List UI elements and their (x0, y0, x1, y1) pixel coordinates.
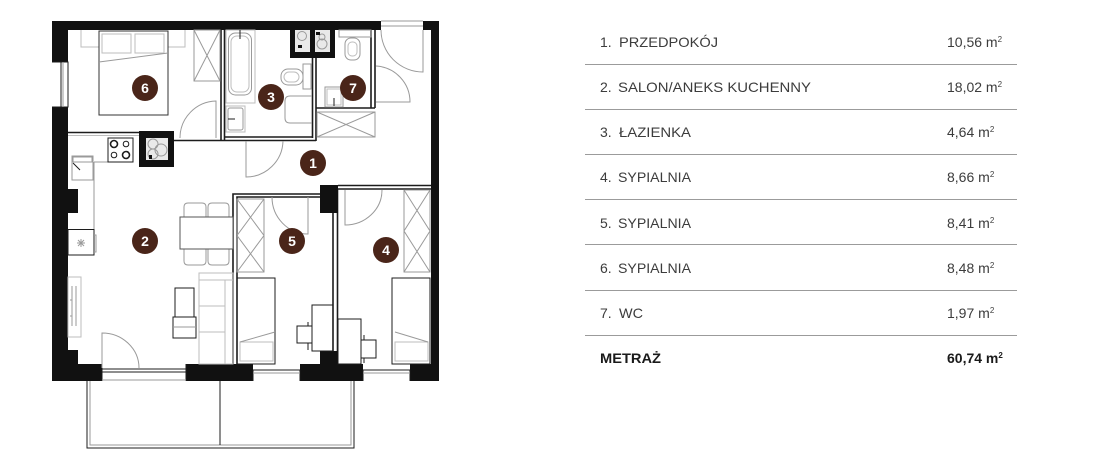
row 7: 2 (990, 306, 995, 315)
row 1 (600, 34, 1003, 50)
row 1: 2 (998, 35, 1003, 44)
row 3: 4,64 m (947, 124, 990, 140)
row 5 (600, 215, 995, 231)
exterior walls (52, 21, 439, 381)
row 2: 2 (998, 80, 1003, 89)
floor plan (52, 20, 439, 448)
dining table (180, 203, 233, 265)
area table (585, 34, 1017, 366)
room marker 1 (300, 150, 326, 176)
row 6: 2 (990, 261, 995, 270)
living room seating (173, 273, 233, 364)
total row (600, 350, 1003, 366)
balcony (87, 381, 354, 448)
room marker 6: 6 (141, 80, 149, 96)
row 2: 18,02 m (947, 79, 998, 95)
row 7 (600, 305, 995, 321)
room marker 7: 7 (349, 80, 357, 96)
row 3: 3. (600, 124, 612, 140)
row 4 (600, 169, 995, 185)
shaft: kitchen (139, 131, 174, 167)
row 7: WC (619, 305, 643, 321)
row 2: SALON/ANEKS KUCHENNY (618, 79, 812, 95)
row 7: 7. (600, 305, 612, 321)
total row: 2 (998, 351, 1003, 360)
total row: METRAŻ (600, 350, 661, 366)
interior walls (174, 30, 431, 365)
room marker 4 (373, 237, 399, 263)
room marker 4: 4 (382, 242, 390, 258)
room marker 1: 1 (309, 155, 317, 171)
room marker 6 (132, 75, 158, 101)
row 1: PRZEDPOKÓJ (619, 34, 718, 50)
row 4: 8,66 m (947, 169, 990, 185)
bedroom 4 furniture (338, 190, 430, 364)
closet (317, 112, 375, 137)
room marker 7 (340, 75, 366, 101)
row 6: SYPIALNIA (618, 260, 692, 276)
row 6: 6. (600, 260, 612, 276)
row 4: SYPIALNIA (618, 169, 692, 185)
bedroom 5 furniture (237, 199, 333, 364)
row 1: 10,56 m (947, 34, 998, 50)
row 5: SYPIALNIA (618, 215, 692, 231)
row 2 (600, 79, 1003, 95)
row 4: 2 (990, 170, 995, 179)
doors (102, 30, 423, 368)
row 3: 2 (990, 125, 995, 134)
row 6: 8,48 m (947, 260, 990, 276)
row 1: 1. (600, 34, 612, 50)
bedroom 6 furniture (81, 30, 220, 115)
room marker 2 (132, 228, 158, 254)
room marker 2: 2 (141, 233, 149, 249)
shaft: bathroom (290, 30, 335, 58)
row 4: 4. (600, 169, 612, 185)
WC fixtures (325, 30, 371, 107)
room marker 5 (279, 228, 305, 254)
row 7: 1,97 m (947, 305, 990, 321)
row 5: 2 (990, 216, 995, 225)
bathroom fixtures (226, 30, 312, 132)
row 3: ŁAZIENKA (619, 124, 692, 140)
total row: 60,74 m (947, 350, 998, 366)
room marker 3: 3 (267, 89, 275, 105)
row 6 (600, 260, 995, 276)
row 2: 2. (600, 79, 612, 95)
room marker 3 (258, 84, 284, 110)
room marker 5: 5 (288, 233, 296, 249)
row 3 (600, 124, 995, 140)
kitchen (68, 132, 140, 337)
row 5: 5. (600, 215, 612, 231)
row 5: 8,41 m (947, 215, 990, 231)
windows (52, 20, 423, 381)
